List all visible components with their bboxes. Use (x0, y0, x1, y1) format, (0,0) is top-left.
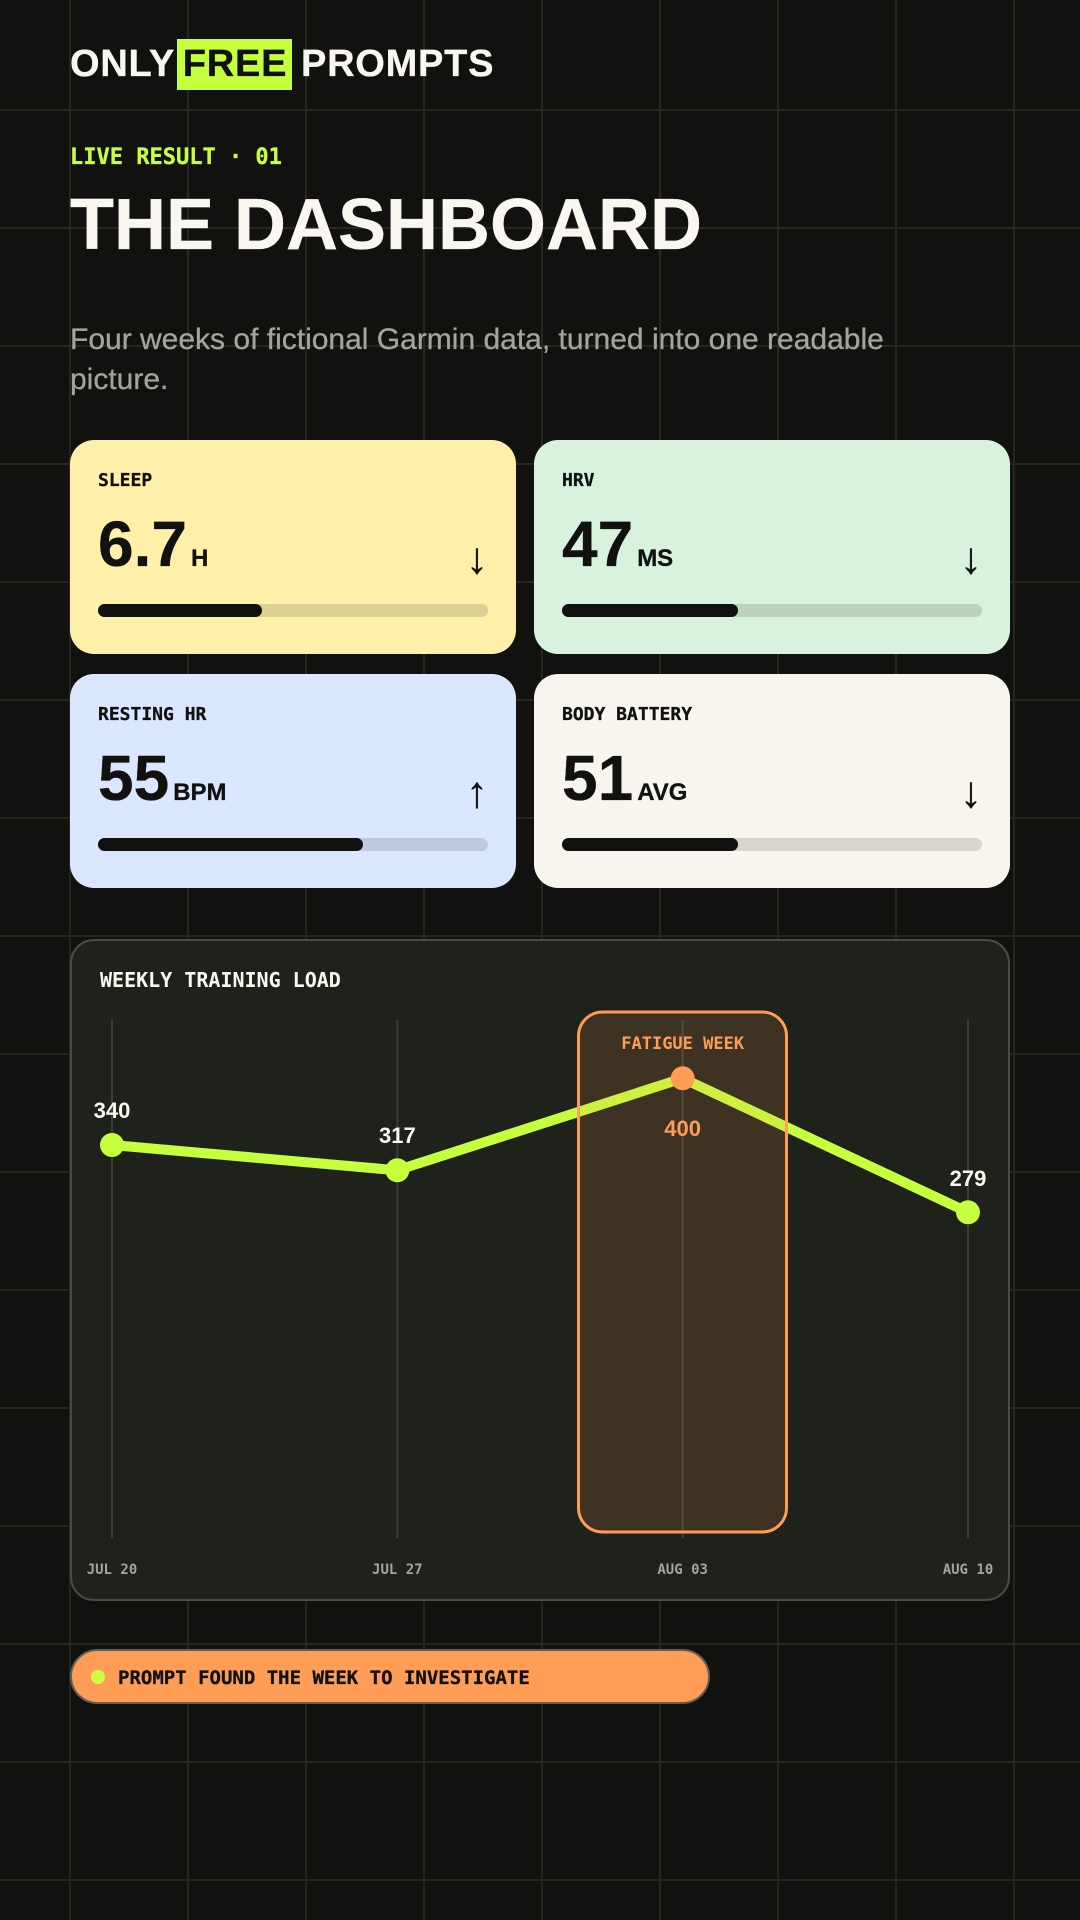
training load line (112, 1078, 968, 1212)
HRV label: HRV (562, 470, 595, 491)
line chart (87, 968, 993, 1578)
eyebrow label: LIVE RESULT · 01 (70, 145, 282, 170)
logo highlight: FREE: FREE (183, 43, 287, 85)
sleep value: 6.7H (98, 508, 208, 580)
panel: resting HR card (70, 674, 516, 888)
body battery label: BODY BATTERY (562, 704, 692, 725)
value 340: 340 (94, 1098, 130, 1123)
x-axis labels: JUL 20 (87, 1562, 137, 1578)
HRV value: 47MS (562, 508, 673, 580)
icon: down arrow: ↓ (466, 534, 488, 583)
resting HR value: 55BPM (98, 742, 227, 814)
body battery progress bar (562, 838, 982, 851)
value 400: 400 (664, 1116, 701, 1141)
logo: PROMPTS (301, 43, 494, 85)
subtitle: Four weeks of fictional Garmin data, turned into one readable picture. (70, 323, 884, 396)
icon: up arrow: ↑ (466, 768, 488, 817)
sleep progress bar (98, 604, 488, 617)
icon: down arrow: ↓ (960, 768, 982, 817)
body battery value: 51AVG (562, 742, 687, 814)
resting HR label: RESTING HR (98, 704, 206, 725)
value 279: 279 (950, 1166, 986, 1191)
x-axis labels: JUL 27 (372, 1562, 423, 1578)
title: THE DASHBOARD (70, 185, 702, 265)
callout pill (70, 1649, 710, 1704)
resting HR progress bar (98, 838, 488, 851)
value 317: 317 (379, 1123, 416, 1148)
data point: Aug 10 (956, 1200, 980, 1224)
sleep label: SLEEP (98, 470, 152, 491)
x-axis labels: AUG 03 (657, 1562, 708, 1578)
logo (70, 39, 494, 90)
data point: Jul 20 (100, 1133, 124, 1157)
logo: ONLY (70, 43, 175, 85)
x-axis labels: AUG 10 (943, 1562, 993, 1578)
icon: down arrow: ↓ (960, 534, 982, 583)
icon: status dot (91, 1670, 105, 1684)
callout text: PROMPT FOUND THE WEEK TO INVESTIGATE (118, 1667, 530, 1689)
HRV progress bar (562, 604, 982, 617)
chart title: WEEKLY TRAINING LOAD (100, 968, 341, 992)
data point: Jul 27 (385, 1158, 409, 1182)
fatigue week label: FATIGUE WEEK (621, 1034, 745, 1054)
panel: sleep card (70, 440, 516, 654)
data point: Aug 03 (671, 1066, 695, 1090)
x-axis labels (87, 1562, 993, 1578)
panel: body battery card (534, 674, 1010, 888)
panel: HRV card (534, 440, 1010, 654)
fatigue week highlight (578, 1012, 786, 1532)
panel: weekly training load chart (70, 939, 1010, 1601)
